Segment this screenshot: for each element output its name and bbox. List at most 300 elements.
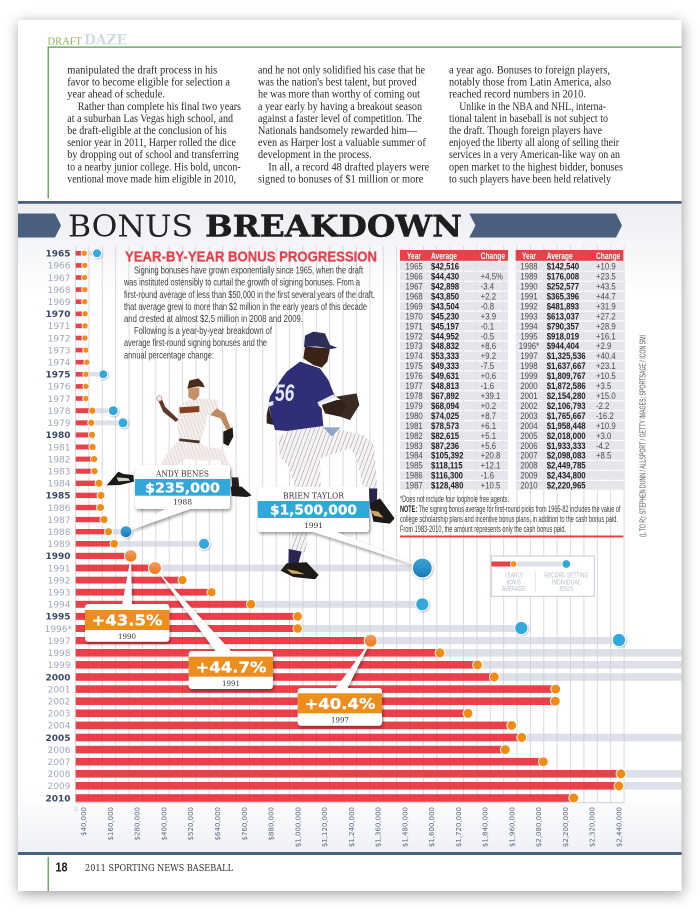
table rows right: 1992	[520, 301, 538, 312]
year labels	[45, 250, 72, 804]
table rows left	[405, 261, 503, 491]
table rows right: $2,220,965	[547, 480, 586, 491]
table rows right: +40.4	[596, 350, 616, 361]
table rows right: 2007	[520, 450, 538, 461]
table rows left: $43,504	[431, 301, 459, 312]
year labels: 2007	[48, 758, 70, 768]
table rows left: +10.5	[481, 480, 501, 491]
callout: Andy Benes $235,000: ANDY BENES	[155, 470, 209, 480]
year labels: 1965	[45, 250, 70, 260]
table rows right: +44.7	[596, 291, 616, 302]
legend label: record setting individual bonus	[544, 570, 588, 593]
table rows right	[519, 261, 616, 491]
table header left: Change	[481, 251, 505, 261]
table rows right: +23.5	[596, 271, 616, 282]
table rows left: 1971	[405, 321, 423, 331]
callout: Brien Taylor $1,500,000	[258, 487, 422, 567]
table rows left: $128,480	[431, 480, 464, 491]
table rows left: $118,115	[431, 460, 463, 471]
table rows left: 1974	[405, 350, 423, 361]
legend label: yearly bonus average: BONUS	[507, 577, 521, 586]
table rows right: $790,357	[547, 321, 579, 331]
table rows right: $1,809,767	[547, 370, 586, 381]
table rows left: 1982	[405, 430, 423, 441]
table rows left: $43,850	[431, 291, 459, 302]
table rows left: $42,898	[431, 281, 459, 292]
table rows right: +10.5	[596, 370, 616, 381]
player photo: Andy Benes	[107, 378, 252, 497]
data table: 1988 to 2010	[516, 250, 623, 491]
article text column 3: a year ago. Bonuses to foreign players,	[449, 64, 610, 76]
table rows left: +12.1	[481, 460, 501, 471]
x axis: $880,000	[268, 807, 276, 840]
table rows right: 2004	[520, 420, 538, 431]
x axis: $1,000,000	[294, 807, 302, 847]
table rows right: $1,958,448	[547, 420, 586, 431]
table header right	[522, 251, 621, 261]
article text column 3: notably those from Latin America, also	[449, 77, 611, 89]
table rows right: +8.5	[596, 450, 611, 461]
table rows left: 1978	[405, 390, 423, 401]
year labels: 2006	[48, 746, 71, 756]
callout: +40.4% 1997: +40.4%	[304, 695, 376, 713]
table rows left: -1.6	[481, 380, 494, 391]
table rows right: $1,765,667	[547, 410, 586, 421]
table rows right: 1996*	[519, 340, 540, 351]
year labels: 1988	[48, 528, 71, 538]
year labels: 1977	[48, 395, 70, 405]
table rows left: $53,333	[431, 350, 459, 361]
callout: Brien Taylor $1,500,000: $1,500,000	[270, 502, 357, 518]
year labels: 2009	[48, 782, 71, 792]
table rows left: 1969	[405, 301, 423, 312]
table rows right: -16.2	[596, 410, 614, 421]
blue record bonus dots	[92, 249, 626, 647]
table rows right: 2003	[520, 410, 538, 421]
table rows left: +4.5%	[481, 271, 503, 282]
year labels: 1984	[48, 480, 71, 490]
player photo: Brien Taylor	[267, 332, 395, 579]
data table: 1965 to 1987	[400, 250, 508, 491]
table rows right: 2010	[520, 480, 538, 491]
table rows right: 1991	[520, 291, 538, 302]
legend label: record setting individual bonus: INDIVIDUAL	[552, 577, 581, 586]
table rows left: 1965	[405, 261, 423, 272]
article text column 1: Rather than complete his final two years	[78, 101, 241, 113]
article text column 2: Nationals handsomely rewarded him—	[258, 125, 417, 137]
table rows right: +27.2	[596, 311, 616, 322]
x axis: $1,360,000	[375, 807, 383, 847]
year labels: 2008	[48, 770, 71, 780]
table rows right: 2008	[520, 460, 538, 471]
year labels: 1978	[48, 407, 71, 417]
table rows right: $1,637,667	[547, 360, 586, 371]
table rows right: 1997	[520, 350, 538, 361]
year labels: 1998	[48, 649, 71, 659]
table footnotes	[400, 494, 623, 538]
table rows left: $74,025	[431, 410, 459, 421]
table rows right: -4.2	[596, 440, 610, 451]
table rows left: 1981	[405, 420, 423, 431]
callout: Andy Benes $235,000: 1988	[173, 498, 192, 506]
table rows left: +5.1	[481, 430, 496, 441]
year labels: 2003	[48, 710, 70, 720]
table rows left: $87,236	[431, 440, 459, 451]
table rows left: +39.1	[481, 390, 501, 401]
table rows right: +31.9	[596, 301, 616, 312]
callout: +40.4% 1997: 1997	[331, 716, 349, 725]
table rows right: +28.9	[596, 321, 616, 331]
table rows right: +10.9	[596, 420, 616, 431]
footer: page number and publication: 2011 SPORTING NEWS BASEBALL	[85, 864, 233, 874]
highlighted dot: 1991 record	[412, 558, 432, 578]
intro text: first-round average of less than $50,000 in the first several years of the draft,	[124, 289, 375, 301]
table rows left: 1967	[405, 281, 423, 292]
table rows right: +23.1	[596, 360, 616, 371]
table rows right: +3.0	[596, 430, 611, 441]
red yearly average bars	[76, 251, 621, 802]
table rows left: $44,952	[431, 331, 459, 341]
year labels: 1983	[48, 468, 70, 478]
article text column 2: development in the process.	[258, 149, 372, 161]
x axis: $160,000	[107, 807, 115, 840]
table rows right: $2,154,280	[547, 390, 586, 401]
infographic panel background	[18, 201, 682, 855]
table rows left: +0.2	[481, 400, 496, 411]
table rows right: $2,018,000	[547, 430, 586, 441]
article text column 3: open market to the highest bidder, bonuses	[449, 161, 623, 173]
player photo: Brien Taylor: 56	[275, 380, 295, 407]
callout: Andy Benes $235,000: $235,000	[145, 480, 220, 496]
table rows left: -7.5	[481, 360, 494, 371]
callout: +44.7% 1991	[148, 562, 273, 689]
year labels: 1968	[48, 286, 71, 296]
x axis: $640,000	[214, 807, 222, 840]
table rows right: $2,434,800	[547, 470, 586, 481]
article text column 1: manipulated the draft process in his	[67, 64, 218, 76]
orange yearly average dots	[81, 250, 626, 803]
year labels: 1980	[45, 431, 70, 441]
section header: draft daze: DRAFT	[48, 36, 83, 48]
table rows left: $68,094	[431, 400, 459, 411]
article text column 1: senior year in 2011, Harper rolled the dice	[67, 137, 236, 149]
table rows right: $2,098,083	[547, 450, 586, 461]
table rows left: 1984	[405, 450, 423, 461]
table rows left: $116,300	[431, 470, 463, 481]
table rows left: +3.9	[481, 311, 496, 322]
table header right: Change	[596, 251, 621, 261]
year labels: 1992	[48, 576, 70, 586]
callout: +40.4% 1997	[298, 634, 382, 726]
table rows right: $142,540	[547, 261, 579, 272]
table rows right: 1998	[520, 360, 538, 371]
table rows left: 1987	[405, 480, 423, 491]
table rows right: +16.1	[596, 331, 616, 341]
table rows right: $176,008	[547, 271, 579, 282]
year labels: 2005	[45, 734, 70, 744]
year labels: 1969	[48, 298, 71, 308]
year labels: 2001	[48, 685, 70, 695]
year labels: 1994	[48, 601, 71, 611]
table rows right: +10.9	[596, 261, 616, 272]
article text column 3: enjoyed the liberty all along of selling their	[449, 137, 619, 149]
year labels: 1990	[45, 552, 70, 562]
year labels: 1972	[48, 334, 70, 344]
year labels: 1995	[45, 613, 70, 623]
table rows right: $2,106,793	[547, 400, 586, 411]
legend	[491, 556, 594, 596]
table rows right: $2,449,785	[547, 460, 586, 471]
intro text: average first-round signing bonuses and the	[124, 337, 267, 349]
intro text: Signing bonuses have grown exponentially since 1965, when the draft	[134, 264, 363, 276]
article text column 3: reached record numbers in 2010.	[449, 89, 586, 101]
table rows left: 1979	[405, 400, 423, 411]
table rows right: 2002	[520, 400, 538, 411]
year labels: 2000	[45, 673, 70, 683]
legend label: yearly bonus average: YEARLY	[504, 570, 523, 579]
year labels: 1973	[48, 346, 70, 356]
table rows left: $42,516	[431, 261, 459, 272]
table rows left: $45,230	[431, 311, 459, 322]
callout: +43.5% 1990: +43.5%	[92, 612, 163, 630]
table rows left: $49,631	[431, 370, 459, 381]
year labels: 1985	[45, 492, 70, 502]
table rows right: $1,933,333	[547, 440, 586, 451]
article text column 3: the draft. Though foreign players have	[449, 125, 602, 137]
article text column 2: he was more than worthy of coming out	[258, 89, 421, 101]
table rows right: $918,019	[547, 331, 579, 341]
title: bonus breakdown: BREAKDOWN	[205, 210, 462, 244]
table rows left: 1972	[405, 331, 423, 341]
table rows right: 2001	[520, 390, 538, 401]
article text column 2: against a faster level of competition. The	[258, 113, 422, 125]
table rows left: +5.6	[481, 440, 496, 451]
year labels: 1986	[48, 504, 71, 514]
table rows left: $49,333	[431, 360, 459, 371]
legend label: yearly bonus average	[502, 570, 526, 593]
table rows left: -3.4	[481, 281, 494, 292]
callout: +44.7% 1991: 1991	[222, 679, 240, 688]
year labels: 1974	[48, 358, 71, 368]
table rows right: $613,037	[547, 311, 579, 322]
year labels: 1981	[48, 443, 70, 453]
year labels: 1967	[48, 274, 70, 284]
intro text: that average grew to more than $2 million in the early years of this decade	[124, 301, 367, 313]
table header left	[407, 251, 505, 261]
table rows right: 1999	[520, 370, 538, 381]
table rows right: +3.5	[596, 380, 611, 391]
x axis: $1,720,000	[455, 807, 463, 847]
x axis	[74, 802, 624, 847]
section header: draft daze: DAZE	[84, 32, 127, 48]
x axis: $520,000	[187, 807, 195, 840]
table rows left: $67,892	[431, 390, 459, 401]
table rows left: -0.1	[481, 321, 494, 331]
table rows left: -0.5	[481, 331, 494, 341]
year labels: 1991	[48, 564, 70, 574]
table rows left: $45,197	[431, 321, 459, 331]
article text column 2	[258, 64, 429, 185]
section header: draft daze	[48, 32, 682, 198]
intro text: annual percentage change:	[124, 350, 214, 362]
table rows right: $1,325,536	[547, 350, 586, 361]
grey record-setting bonus bars	[84, 251, 682, 790]
table rows right: $365,396	[547, 291, 579, 302]
table rows left: 1976	[405, 370, 423, 381]
table rows right: $481,893	[547, 301, 579, 312]
year labels: 1989	[48, 540, 71, 550]
article text column 1: ventional move made him eligible in 2010,	[67, 173, 236, 185]
table rows left: $48,832	[431, 340, 459, 351]
table header right: Average	[547, 251, 573, 261]
article text column 2: and he not only solidified his case that he	[258, 64, 425, 76]
x axis: $280,000	[134, 807, 142, 840]
article text column 1: to a nearby junior college. His bold, uncon-	[67, 161, 241, 173]
year labels: 1979	[48, 419, 71, 429]
table rows right: +2.9	[596, 340, 611, 351]
table rows left: 1980	[405, 410, 423, 421]
year labels: 1997	[48, 637, 70, 647]
table rows left: 1970	[405, 311, 423, 322]
table rows right: 1988	[520, 261, 538, 272]
x axis: $40,000	[80, 807, 88, 836]
year labels: 1971	[48, 322, 70, 332]
table footnotes: From 1983-2010, the amount represents only the cash bonus paid.	[400, 524, 566, 534]
article text column 3: to such players have been held relatively	[449, 173, 611, 185]
callout: Brien Taylor $1,500,000: 1991	[304, 521, 323, 530]
year labels: 2004	[48, 722, 71, 732]
year labels: 1993	[48, 588, 70, 598]
table rows right: 1995	[520, 331, 538, 341]
x axis: $760,000	[241, 807, 249, 840]
year labels: 2010	[45, 794, 70, 804]
table rows right: 1989	[520, 271, 538, 282]
x axis: $1,600,000	[428, 807, 436, 847]
article text column 1: by dropping out of school and transferring	[67, 149, 239, 161]
article text column 2: signed to bonuses of $1 million or more	[258, 172, 423, 185]
table rows right: $944,404	[547, 340, 579, 351]
x axis: $1,960,000	[508, 807, 516, 847]
year labels: 1976	[48, 383, 71, 393]
legend label: record setting individual bonus: RECORD SETTING	[544, 570, 588, 579]
photo credit: (L TO R): STEPHEN DUNN / ALLSPORT / GETTY IMAGES; SPORTSAGE / ICON SMI	[638, 335, 648, 537]
year labels: 1996*	[45, 625, 72, 635]
intro text: and crested at almost $2.5 million in 2008 and 2009.	[124, 313, 303, 325]
table rows left: +0.6	[481, 370, 496, 381]
table rows left: 1975	[405, 360, 423, 371]
table footnotes: *Does not include four loophole free agents.	[400, 494, 509, 504]
table rows left: 1973	[405, 340, 423, 351]
article text column 1: favor to become eligible for selection a	[67, 77, 230, 89]
article text column 1: at a suburban Las Vegas high school, and	[67, 113, 233, 125]
article text column 2: In all, a record 48 drafted players were	[268, 161, 429, 173]
x axis: $2,320,000	[589, 807, 597, 847]
title: bonus breakdown	[18, 210, 622, 244]
table rows left: 1966	[405, 271, 423, 282]
legend label: record setting individual bonus: BONUS	[559, 584, 573, 593]
article text column 2: a year early by having a breakout season	[258, 101, 422, 113]
x axis: $1,840,000	[482, 807, 490, 847]
table header left: Average	[431, 251, 457, 261]
article text column 2: even as Harper lost a valuable summer of	[258, 137, 426, 149]
year labels: 2002	[48, 698, 70, 708]
year labels: 1975	[45, 371, 70, 381]
article text column 3: services in a very American-like way on an	[449, 149, 620, 161]
x axis: $1,480,000	[401, 807, 409, 847]
table rows left: +8.6	[481, 340, 496, 351]
article text column 1: year ahead of schedule.	[67, 89, 165, 101]
table header right: Year	[522, 251, 537, 261]
table rows left: 1986	[405, 470, 423, 481]
table rows right: 2000	[520, 380, 538, 391]
table rows left: 1985	[405, 460, 423, 471]
callout: +44.7% 1991: +44.7%	[196, 658, 267, 676]
table header left: Year	[407, 251, 422, 261]
x axis: $2,080,000	[535, 807, 543, 847]
article text column 3: Unlike in the NBA and NHL, interna-	[459, 101, 606, 113]
table rows right: 1990	[520, 281, 538, 292]
x axis: $400,000	[160, 807, 168, 840]
table rows left: +20.8	[481, 450, 501, 461]
table rows left: +8.7	[481, 410, 496, 421]
table rows right: $252,577	[547, 281, 579, 292]
x axis: $1,120,000	[321, 807, 329, 847]
table rows left: $78,573	[431, 420, 459, 431]
callout: Andy Benes $235,000	[126, 465, 230, 532]
year labels: 1987	[48, 516, 70, 526]
callout: +43.5% 1990	[85, 550, 169, 642]
table rows left: +6.1	[481, 420, 496, 431]
table rows left: 1977	[405, 380, 423, 391]
table rows right: 2009	[520, 470, 538, 481]
table rows left: $82,615	[431, 430, 459, 441]
table rows right: 2006	[520, 440, 538, 451]
footer: page number and publication	[48, 857, 233, 891]
table rows left: 1968	[405, 291, 423, 302]
x axis: $2,200,000	[562, 807, 570, 847]
highlighted dot: 1988 record	[120, 526, 132, 538]
table rows left: +2.2	[481, 291, 496, 302]
year labels: 1982	[48, 455, 70, 465]
article text column 3	[449, 64, 623, 185]
callout: Brien Taylor $1,500,000: BRIEN TAYLOR	[283, 492, 345, 502]
x axis: $1,240,000	[348, 807, 356, 847]
year labels: 1966	[48, 262, 71, 272]
intro text	[123, 264, 375, 362]
article text column 3: tional talent in baseball is not subject to	[449, 113, 608, 125]
article text column 2: was the nation's best talent, but proved	[258, 77, 417, 89]
table rows right: +43.5	[596, 281, 616, 292]
year labels: 1999	[48, 661, 71, 671]
table rows right: 2005	[520, 430, 538, 441]
article text column 1: be draft-eligible at the conclusion of his	[67, 125, 227, 137]
table rows left: +9.2	[481, 350, 496, 361]
table rows right: 1993	[520, 311, 538, 322]
intro heading: YEAR-BY-YEAR BONUS PROGRESSION	[125, 248, 377, 266]
table rows left: $48,813	[431, 380, 459, 391]
table rows right: 1994	[520, 321, 538, 331]
footer: page number and publication: 18	[56, 860, 68, 874]
table rows left: $44,430	[431, 271, 459, 282]
article text column 1	[67, 64, 241, 185]
table rows right: $1,872,586	[547, 380, 586, 391]
intro text: Following is a year-by-year breakdown of	[134, 325, 272, 337]
table rows left: -1.6	[481, 470, 494, 481]
intro text: was instituted ostensibly to curtail the growth of signing bonuses. From a	[123, 277, 360, 289]
table rows right: -2.2	[596, 400, 610, 411]
legend label: yearly bonus average: AVERAGE	[502, 584, 526, 593]
year labels: 1970	[45, 310, 70, 320]
